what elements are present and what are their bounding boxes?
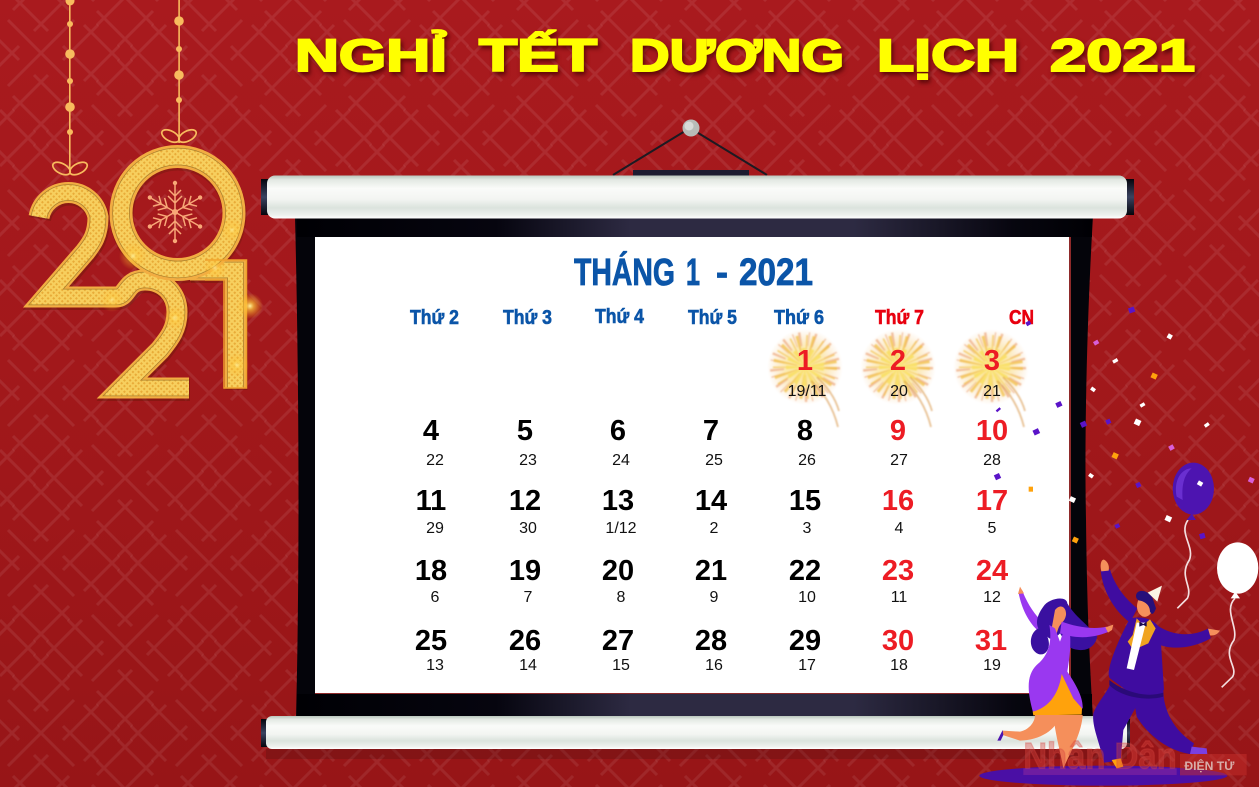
week 5: 14 xyxy=(519,657,537,674)
top roller xyxy=(261,176,1134,218)
week 3: 16 xyxy=(882,485,914,517)
week 4: 8 xyxy=(617,589,626,606)
week 4: 18 xyxy=(415,555,447,587)
week 2: 28 xyxy=(983,452,1001,469)
week 4: 23 xyxy=(882,555,914,587)
week 5: 30 xyxy=(882,625,914,657)
week 1: 1 xyxy=(797,345,813,377)
title xyxy=(295,30,1195,81)
calendar heading: 1 xyxy=(686,252,700,294)
week 2: 22 xyxy=(426,452,444,469)
watermark: ĐIỆN TỬ xyxy=(1184,758,1234,773)
week 5: 15 xyxy=(612,657,630,674)
week 4: 21 xyxy=(695,555,727,587)
hanging gold 2021 ornament xyxy=(39,0,263,390)
week 1: 3 xyxy=(984,345,1000,377)
icon: snowflake xyxy=(144,181,206,243)
week 2: 10 xyxy=(976,415,1008,447)
scroll frame xyxy=(295,216,1093,718)
title: DƯƠNG xyxy=(630,30,844,81)
week 5: 19 xyxy=(983,657,1001,674)
week 5: 29 xyxy=(789,625,821,657)
week 4: 12 xyxy=(983,589,1001,606)
week 2: 25 xyxy=(705,452,723,469)
week 3: 4 xyxy=(895,520,904,537)
week 1 xyxy=(788,345,1001,400)
calendar heading: - xyxy=(716,252,728,294)
week 5: 28 xyxy=(695,625,727,657)
week 5: 27 xyxy=(602,625,634,657)
week 5: 26 xyxy=(509,625,541,657)
week 3 xyxy=(416,485,1008,537)
title: TẾT xyxy=(479,30,597,81)
week 1: 19/11 xyxy=(788,383,827,400)
figure: man xyxy=(1093,560,1220,768)
hanger xyxy=(613,120,767,176)
week 1: 20 xyxy=(890,383,908,400)
weekday header: Thứ 4 xyxy=(595,305,645,328)
floor ellipse xyxy=(979,766,1227,786)
week 5: 13 xyxy=(426,657,444,674)
week 4 xyxy=(415,555,1008,606)
week 3: 14 xyxy=(695,485,727,517)
week 4: 10 xyxy=(798,589,816,606)
week 2: 24 xyxy=(612,452,630,469)
week 3: 13 xyxy=(602,485,634,517)
confetti xyxy=(994,306,1255,544)
week 4: 9 xyxy=(710,589,719,606)
calendar heading xyxy=(574,250,813,294)
calendar heading: 2021 xyxy=(739,252,813,294)
title: LỊCH xyxy=(877,30,1019,81)
week 5: 25 xyxy=(415,625,447,657)
weekday header: Thứ 5 xyxy=(688,306,737,329)
week 4: 6 xyxy=(431,589,440,606)
weekday header: Thứ 2 xyxy=(410,306,459,329)
week 3: 29 xyxy=(426,520,444,537)
party illustration xyxy=(979,463,1258,786)
week 3: 30 xyxy=(519,520,537,537)
week 5: 18 xyxy=(890,657,908,674)
week 3: 1/12 xyxy=(605,520,637,537)
week 2: 5 xyxy=(517,415,533,447)
icon: gold digits 2021 xyxy=(39,156,263,390)
watermark: Nhân Dân xyxy=(1023,734,1177,776)
week 5: 17 xyxy=(798,657,816,674)
icon: white balloon xyxy=(1217,542,1258,687)
frame top band xyxy=(297,218,1092,237)
week 1: 21 xyxy=(983,383,1001,400)
week 3: 11 xyxy=(416,485,446,517)
week 2: 26 xyxy=(798,452,816,469)
week 2 xyxy=(423,415,1008,469)
week 2: 6 xyxy=(610,415,626,447)
title: NGHỈ xyxy=(295,30,447,81)
week 5: 31 xyxy=(975,625,1007,657)
icon: bows xyxy=(51,127,198,177)
weekday header: CN xyxy=(1009,306,1034,329)
week 4: 20 xyxy=(602,555,634,587)
week 3: 12 xyxy=(509,485,541,517)
calendar days xyxy=(415,345,1008,674)
week 2: 23 xyxy=(519,452,537,469)
week 3: 3 xyxy=(803,520,812,537)
week 4: 7 xyxy=(524,589,533,606)
week 2: 27 xyxy=(890,452,908,469)
calendar heading: THÁNG xyxy=(574,250,675,294)
week 2: 4 xyxy=(423,415,439,447)
week 5 xyxy=(415,625,1007,674)
week 3: 2 xyxy=(710,520,719,537)
week 3: 17 xyxy=(976,485,1008,517)
bottom roller xyxy=(261,716,1130,759)
week 3: 15 xyxy=(789,485,821,517)
frame bottom band xyxy=(297,694,1092,716)
icon: purple balloon xyxy=(1173,463,1214,608)
week 4: 22 xyxy=(789,555,821,587)
week 2: 8 xyxy=(797,415,813,447)
week 3: 5 xyxy=(988,520,997,537)
weekday header: Thứ 3 xyxy=(503,306,552,329)
week 5: 16 xyxy=(705,657,723,674)
week 4: 11 xyxy=(891,589,907,606)
week 1: 2 xyxy=(890,345,906,377)
weekday header xyxy=(410,305,1034,329)
figure: woman xyxy=(997,587,1113,768)
weekday header: Thứ 7 xyxy=(875,306,924,329)
fireworks on holidays xyxy=(767,329,1029,427)
week 2: 9 xyxy=(890,415,906,447)
week 2: 7 xyxy=(703,415,719,447)
weekday header: Thứ 6 xyxy=(774,306,824,329)
icon: bead strings xyxy=(65,0,184,172)
week 4: 24 xyxy=(976,555,1008,587)
title: 2021 xyxy=(1050,30,1195,81)
calendar paper xyxy=(315,237,1071,694)
week 4: 19 xyxy=(509,555,541,587)
